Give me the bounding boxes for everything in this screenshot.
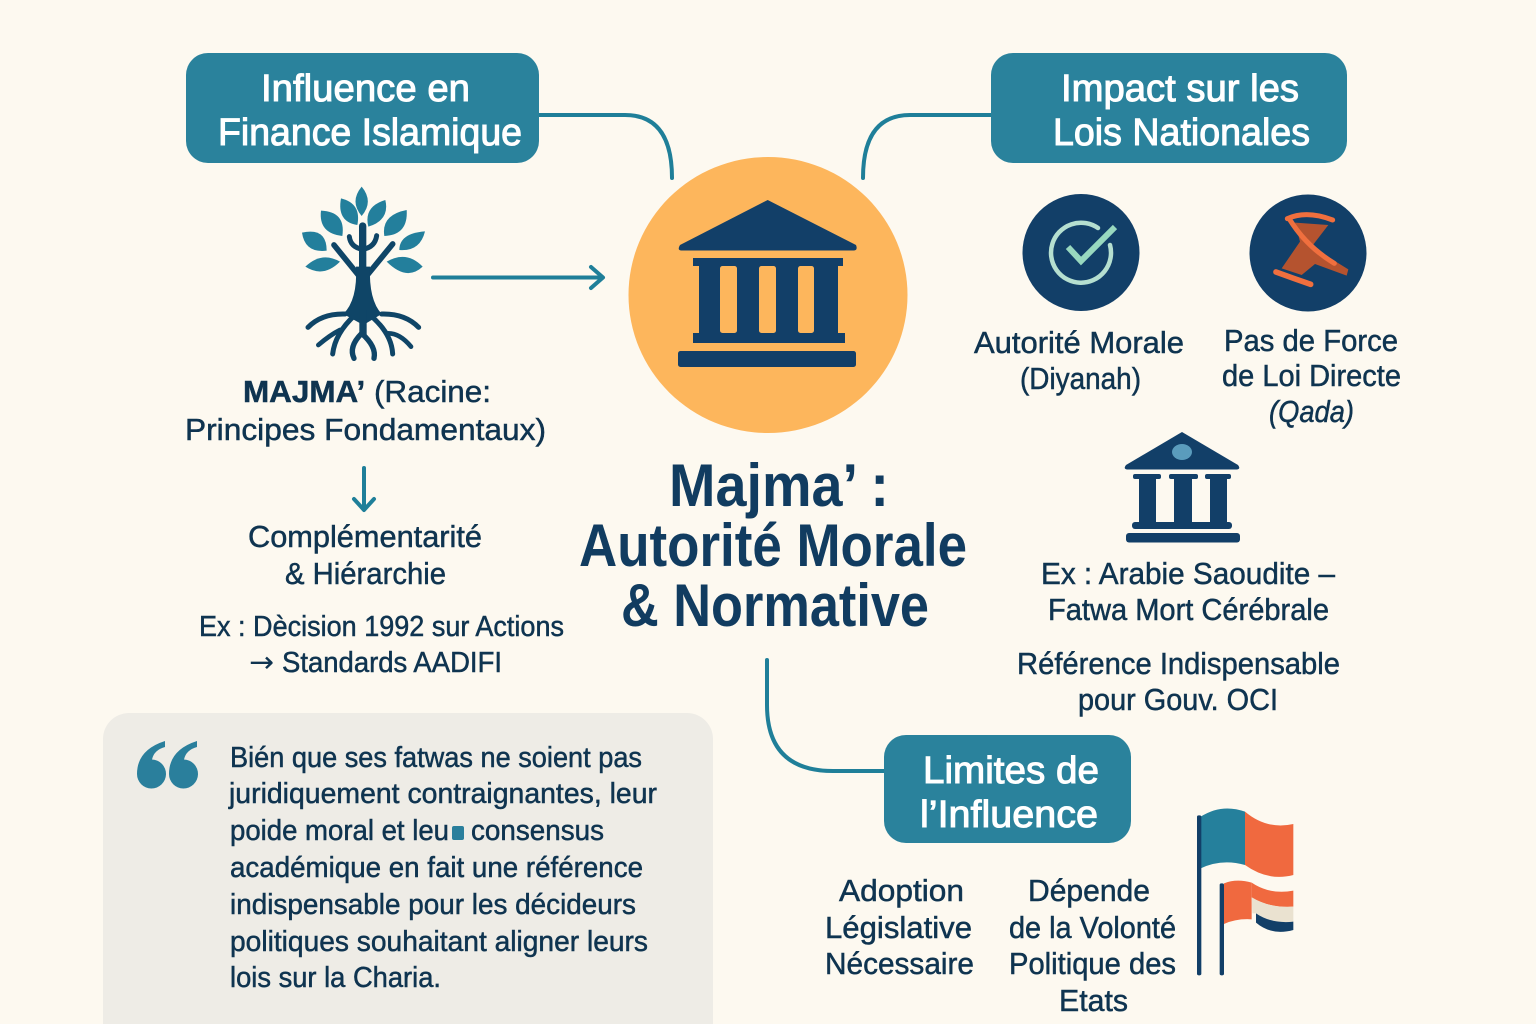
icon: small institution xyxy=(1125,432,1240,542)
heading: Limites de l'Influence: l’Influence xyxy=(920,794,1098,836)
title: & Normative xyxy=(621,572,929,639)
text: complementarity: & Hiérarchie xyxy=(285,556,446,591)
heading: Impact sur les Lois Nationales: Lois Nationales xyxy=(1053,112,1310,154)
text: example AAOIFI: Ex : Dècision 1992 sur Actions xyxy=(199,611,564,643)
text: legislative adoption: Adoption xyxy=(839,873,964,908)
label: no direct legal force: Pas de Force xyxy=(1224,323,1398,358)
text: legislative adoption: Nécessaire xyxy=(825,946,974,981)
text: political will: de la Volonté xyxy=(1009,910,1176,945)
connector: finance to centre xyxy=(537,115,672,178)
title xyxy=(579,452,967,639)
text: political will: Etats xyxy=(1059,983,1128,1018)
text: quote body: académique en fait une référence xyxy=(230,852,643,884)
text: Saudi example: Ex : Arabie Saoudite – xyxy=(1041,556,1336,591)
text: indispensable reference xyxy=(1017,646,1340,717)
heading: Impact sur les Lois Nationales: Impact sur les xyxy=(1061,68,1299,110)
text: political will: Politique des xyxy=(1009,946,1176,981)
text: indispensable reference: Référence Indispensable xyxy=(1017,646,1340,681)
label: no direct legal force: de Loi Directe xyxy=(1222,358,1401,393)
title: Autorité Morale xyxy=(579,512,967,579)
text: complementarity xyxy=(248,519,482,591)
connector: centre to limits xyxy=(767,660,886,771)
arrow: tree to institution xyxy=(433,267,603,288)
heading: Influence en Finance Islamique xyxy=(186,53,539,163)
title: Majma’ : xyxy=(669,452,889,519)
text: quote body: Bién que ses fatwas ne soient pas xyxy=(230,742,642,774)
text: quote body: lois sur la Charia. xyxy=(230,962,441,994)
text: quote body: juridiquement contraignantes, leur xyxy=(228,778,657,810)
icon: moral authority check xyxy=(1022,194,1140,311)
text: political will: Dépende xyxy=(1028,873,1150,908)
text: legislative adoption: Législative xyxy=(825,910,972,945)
icon: central institution xyxy=(628,157,908,433)
text: Majma racine xyxy=(185,374,546,447)
icon: gavel crossed out xyxy=(1250,194,1366,312)
text: quote body: indispensable pour les décideurs xyxy=(230,889,636,921)
label: moral authority: Autorité Morale xyxy=(974,325,1184,360)
icon: tree with roots xyxy=(302,187,425,358)
text: example AAOIFI: Standards AADIFI xyxy=(282,647,502,679)
text: political will xyxy=(1009,873,1176,1018)
heading: Limites de l'Influence xyxy=(884,735,1131,843)
heading: Limites de l'Influence: Limites de xyxy=(923,750,1099,792)
text: quote body: poide moral et leu xyxy=(230,815,449,847)
label: moral authority xyxy=(974,325,1184,396)
text: Saudi example xyxy=(1041,556,1336,627)
text: quote body: consensus xyxy=(471,815,604,847)
heading: Influence en Finance Islamique: Influence en xyxy=(261,68,470,110)
text: indispensable reference: pour Gouv. OCI xyxy=(1078,682,1278,717)
label: no direct legal force: (Qada) xyxy=(1269,394,1354,429)
icon: quotation marks xyxy=(137,741,198,788)
text: example AAOIFI xyxy=(199,611,564,679)
arrow: down xyxy=(354,468,374,510)
connector: laws to centre xyxy=(863,115,993,178)
text: example AAOIFI: → xyxy=(249,645,274,679)
icon: flags xyxy=(1197,808,1293,975)
text: quote body: politiques souhaitant aligner leurs xyxy=(230,926,648,958)
text: Saudi example: Fatwa Mort Cérébrale xyxy=(1048,592,1329,627)
label: moral authority: (Diyanah) xyxy=(1020,361,1141,396)
text: legislative adoption xyxy=(825,873,974,981)
text: Majma racine: MAJMA’ (Racine: xyxy=(243,374,491,409)
text: complementarity: Complémentarité xyxy=(248,519,482,554)
panel: quote xyxy=(103,713,713,1024)
heading: Influence en Finance Islamique: Finance Islamique xyxy=(218,112,522,154)
heading: Impact sur les Lois Nationales xyxy=(991,53,1347,163)
text: Majma racine: Principes Fondamentaux) xyxy=(185,412,546,447)
label: no direct legal force xyxy=(1222,323,1401,429)
text: quote body xyxy=(228,742,657,994)
